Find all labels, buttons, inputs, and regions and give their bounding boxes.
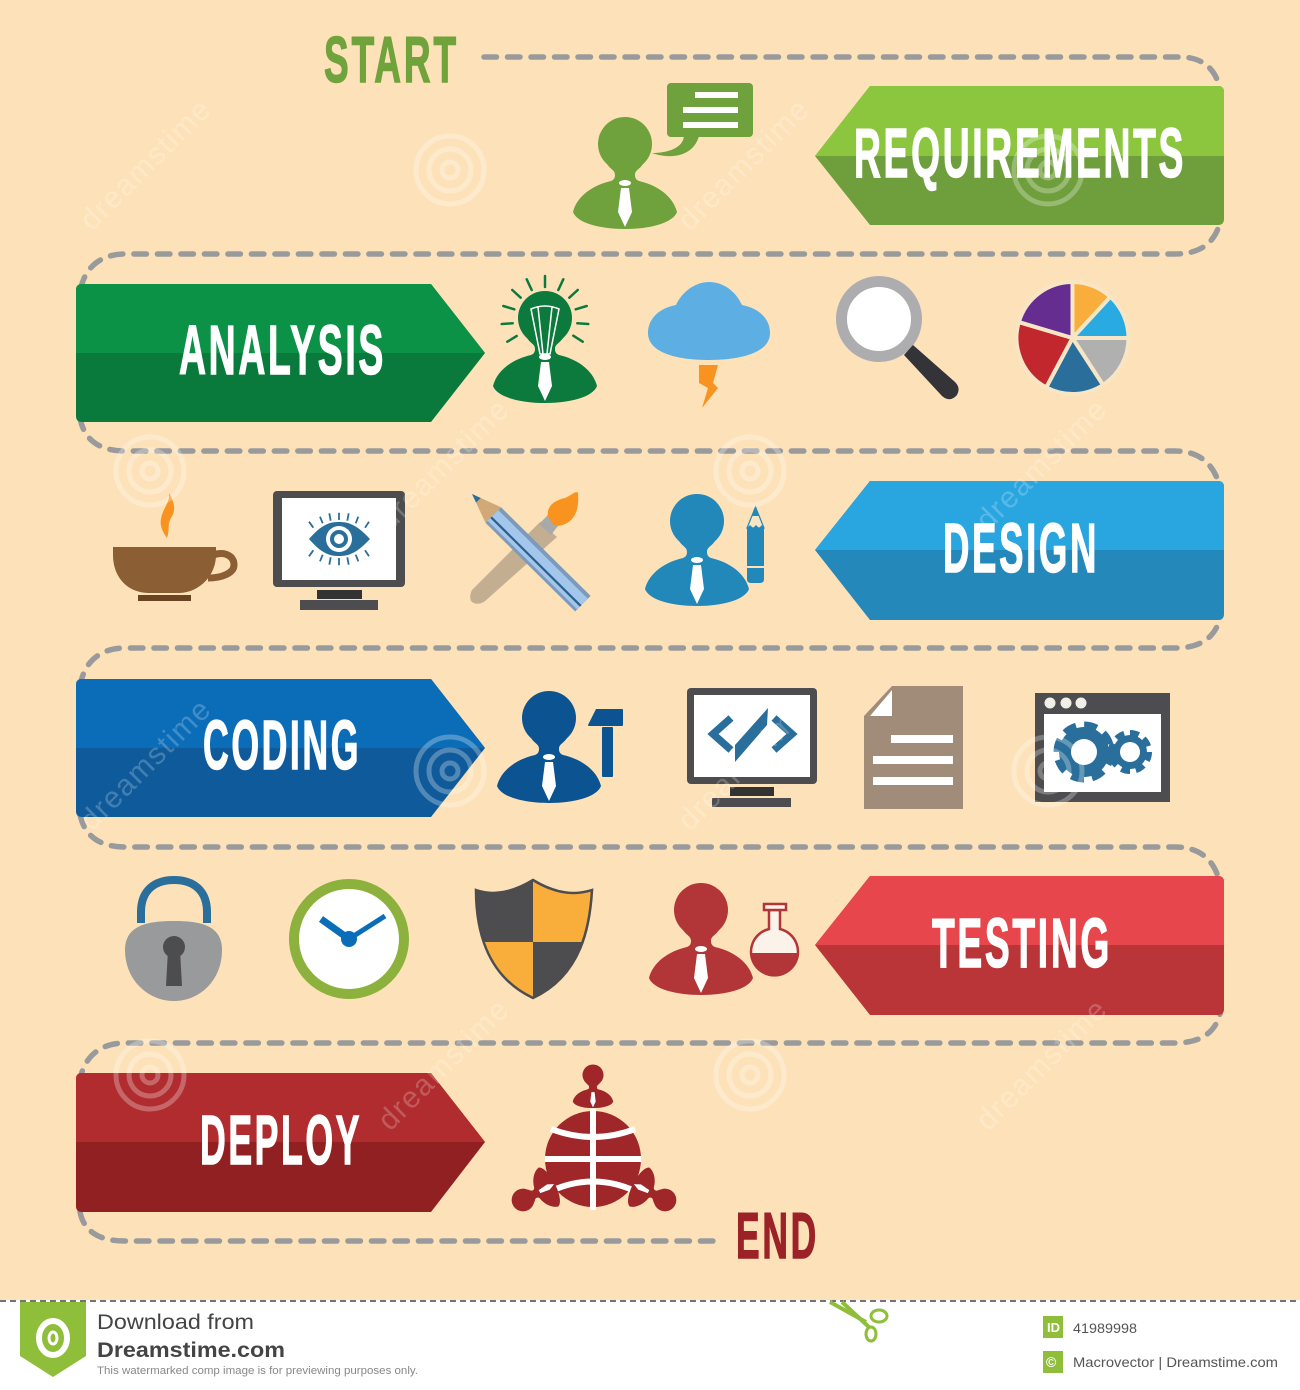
footer download text: This watermarked comp image is for previewing purposes only.	[97, 1365, 418, 1377]
icon: globe with people	[503, 1064, 685, 1225]
icon: person with light bulb head	[493, 276, 597, 403]
footer image id: 41989998	[1073, 1320, 1137, 1336]
end label: END	[736, 1199, 819, 1272]
watermark overlay: dreamstime	[74, 693, 217, 837]
icon: magnifying glass	[842, 282, 959, 399]
banner: analysis: ANALYSIS	[179, 311, 386, 389]
banner: design: DESIGN	[943, 509, 1099, 587]
banner: coding	[76, 679, 485, 817]
banner: deploy: DEPLOY	[200, 1101, 362, 1179]
watermark overlay: dreamstime	[74, 93, 217, 237]
dashed process path	[80, 57, 1220, 1241]
watermark overlay: dreamstime	[970, 993, 1113, 1137]
banner: requirements	[815, 86, 1224, 225]
icon: padlock	[125, 880, 222, 1001]
icon: monitor with eye	[273, 491, 405, 610]
footer credit: ©	[1046, 1354, 1057, 1370]
banner: coding: CODING	[203, 706, 361, 784]
icon: scissors	[830, 1302, 887, 1341]
icon: shield	[476, 880, 592, 998]
watermark overlay: dreamstime	[970, 393, 1113, 537]
watermark overlay: dreamstime	[372, 393, 515, 537]
banner: testing	[815, 876, 1224, 1015]
icon: person with hammer	[497, 691, 623, 803]
icon: person with speech bubble	[573, 83, 753, 229]
icon: coffee cup	[113, 493, 234, 601]
footer credit: Macrovector | Dreamstime.com	[1073, 1354, 1278, 1370]
footer download text	[97, 1311, 418, 1377]
banner: deploy	[76, 1073, 485, 1212]
banner: design	[815, 481, 1224, 620]
icon: monitor with code symbol	[687, 688, 817, 807]
icon: person with flask	[649, 883, 798, 995]
footer image id: ID	[1047, 1320, 1060, 1335]
icon: document	[864, 686, 963, 809]
icon: clock	[294, 884, 404, 994]
icon: footer logo badge	[20, 1302, 86, 1377]
footer download text: Dreamstime.com	[97, 1339, 285, 1362]
icon: pencil and brush	[464, 486, 591, 612]
footer credit	[1043, 1351, 1278, 1373]
footer dashed cut line	[0, 1300, 1300, 1302]
watermark overlay: dreamstime	[672, 93, 815, 237]
icon: storm cloud	[648, 282, 770, 408]
icon: browser window with gears	[1035, 693, 1170, 802]
watermark overlay: dreamstime	[672, 693, 815, 837]
icon: person with pencil	[645, 494, 764, 606]
banner: analysis	[76, 284, 485, 422]
start label: START	[324, 23, 459, 96]
banner: testing: TESTING	[932, 904, 1112, 982]
footer download text: Download from	[97, 1311, 254, 1334]
watermark overlay	[74, 93, 1113, 1137]
footer image id	[1043, 1316, 1137, 1338]
icon: pie chart	[1017, 282, 1128, 394]
watermark overlay: dreamstime	[372, 993, 515, 1137]
